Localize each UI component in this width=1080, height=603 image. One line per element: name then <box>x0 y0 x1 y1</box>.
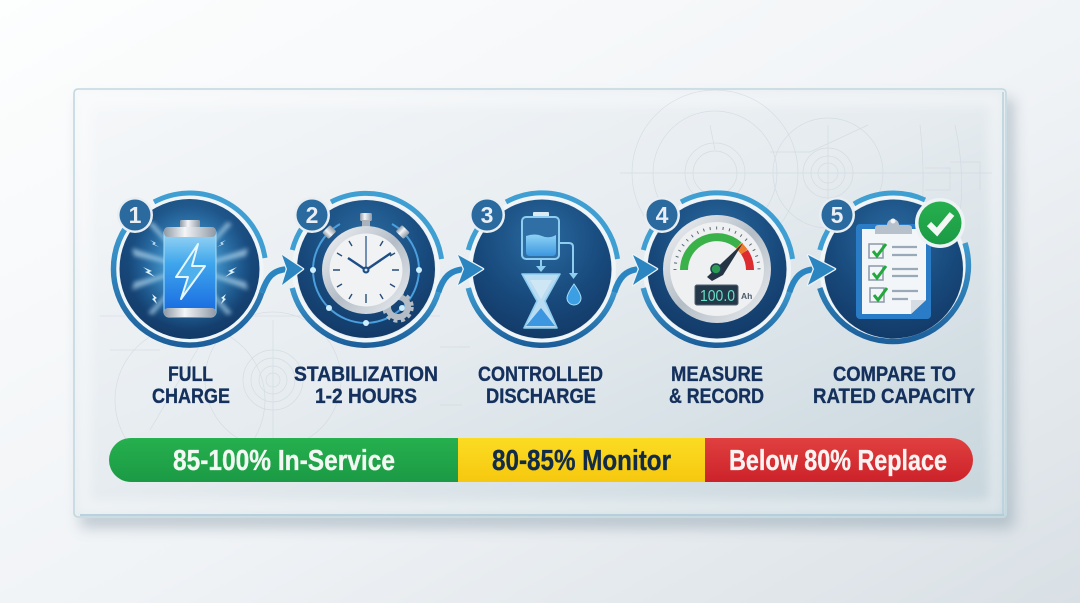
number badge 3: 3 <box>481 202 493 228</box>
label: full charge <box>152 362 230 408</box>
label: measure and record: MEASURE <box>671 362 763 386</box>
label: controlled discharge <box>478 362 603 408</box>
icon: clipboard <box>856 218 931 319</box>
label: full charge: CHARGE <box>152 384 230 408</box>
number badge 5: 5 <box>831 202 844 228</box>
label: full charge: FULL <box>168 362 213 386</box>
label: controlled discharge: DISCHARGE <box>486 384 596 408</box>
label: compare to rated capacity <box>813 362 975 408</box>
gear <box>384 293 412 321</box>
step 5: compare to rated capacity <box>813 193 975 408</box>
number badge 3 <box>469 197 505 233</box>
label: replace: Below 80% Replace <box>729 445 947 477</box>
number badge 4: 4 <box>656 202 669 228</box>
icon: battery with bolt <box>128 206 252 330</box>
ring 3 <box>468 193 618 345</box>
step 2: stabilization <box>292 193 442 408</box>
number badge 1: 1 <box>129 202 142 228</box>
ring 4 <box>643 193 792 345</box>
ring 5 <box>820 193 968 342</box>
label: monitor: 80-85% Monitor <box>492 445 671 477</box>
number badge 1 <box>117 197 153 233</box>
step 4: measure and record <box>643 193 792 408</box>
label: stabilization <box>294 362 438 408</box>
number badge 2 <box>294 197 330 233</box>
number badge 2: 2 <box>306 202 318 228</box>
icon: stopwatch <box>310 213 422 326</box>
label: compare to rated capacity: COMPARE TO <box>833 362 956 386</box>
arrow: step 1 to 2 <box>262 255 303 292</box>
label: stabilization: STABILIZATION <box>294 362 438 386</box>
number badge 5 <box>819 197 855 233</box>
label: in-service: 85-100% In-Service <box>173 445 395 477</box>
icon: gauge: 100.0 <box>700 288 735 305</box>
faint engineering drawing lines <box>100 90 992 475</box>
icon: gauge: Ah <box>741 291 752 301</box>
label: controlled discharge: CONTROLLED <box>478 362 603 386</box>
arrow: step 2 to 3 <box>438 255 483 292</box>
arrow: step 3 to 4 <box>614 255 657 292</box>
status bar <box>109 438 973 482</box>
panel: glass plate <box>73 88 1014 528</box>
step 1: full charge <box>113 193 265 408</box>
label: compare to rated capacity: RATED CAPACITY <box>813 384 975 408</box>
number badge 4 <box>644 197 680 233</box>
arrow: step 4 to 5 <box>789 255 835 292</box>
label: measure and record: & RECORD <box>669 384 764 408</box>
ring 1 <box>113 193 265 345</box>
step 3: controlled discharge <box>468 193 618 408</box>
ring 2 <box>292 193 442 345</box>
label: measure and record <box>669 362 764 408</box>
icon: green check badge <box>915 198 965 248</box>
label: stabilization: 1-2 HOURS <box>315 384 417 408</box>
icon: gauge <box>663 215 771 323</box>
icon: discharge bag and hourglass <box>522 212 581 328</box>
